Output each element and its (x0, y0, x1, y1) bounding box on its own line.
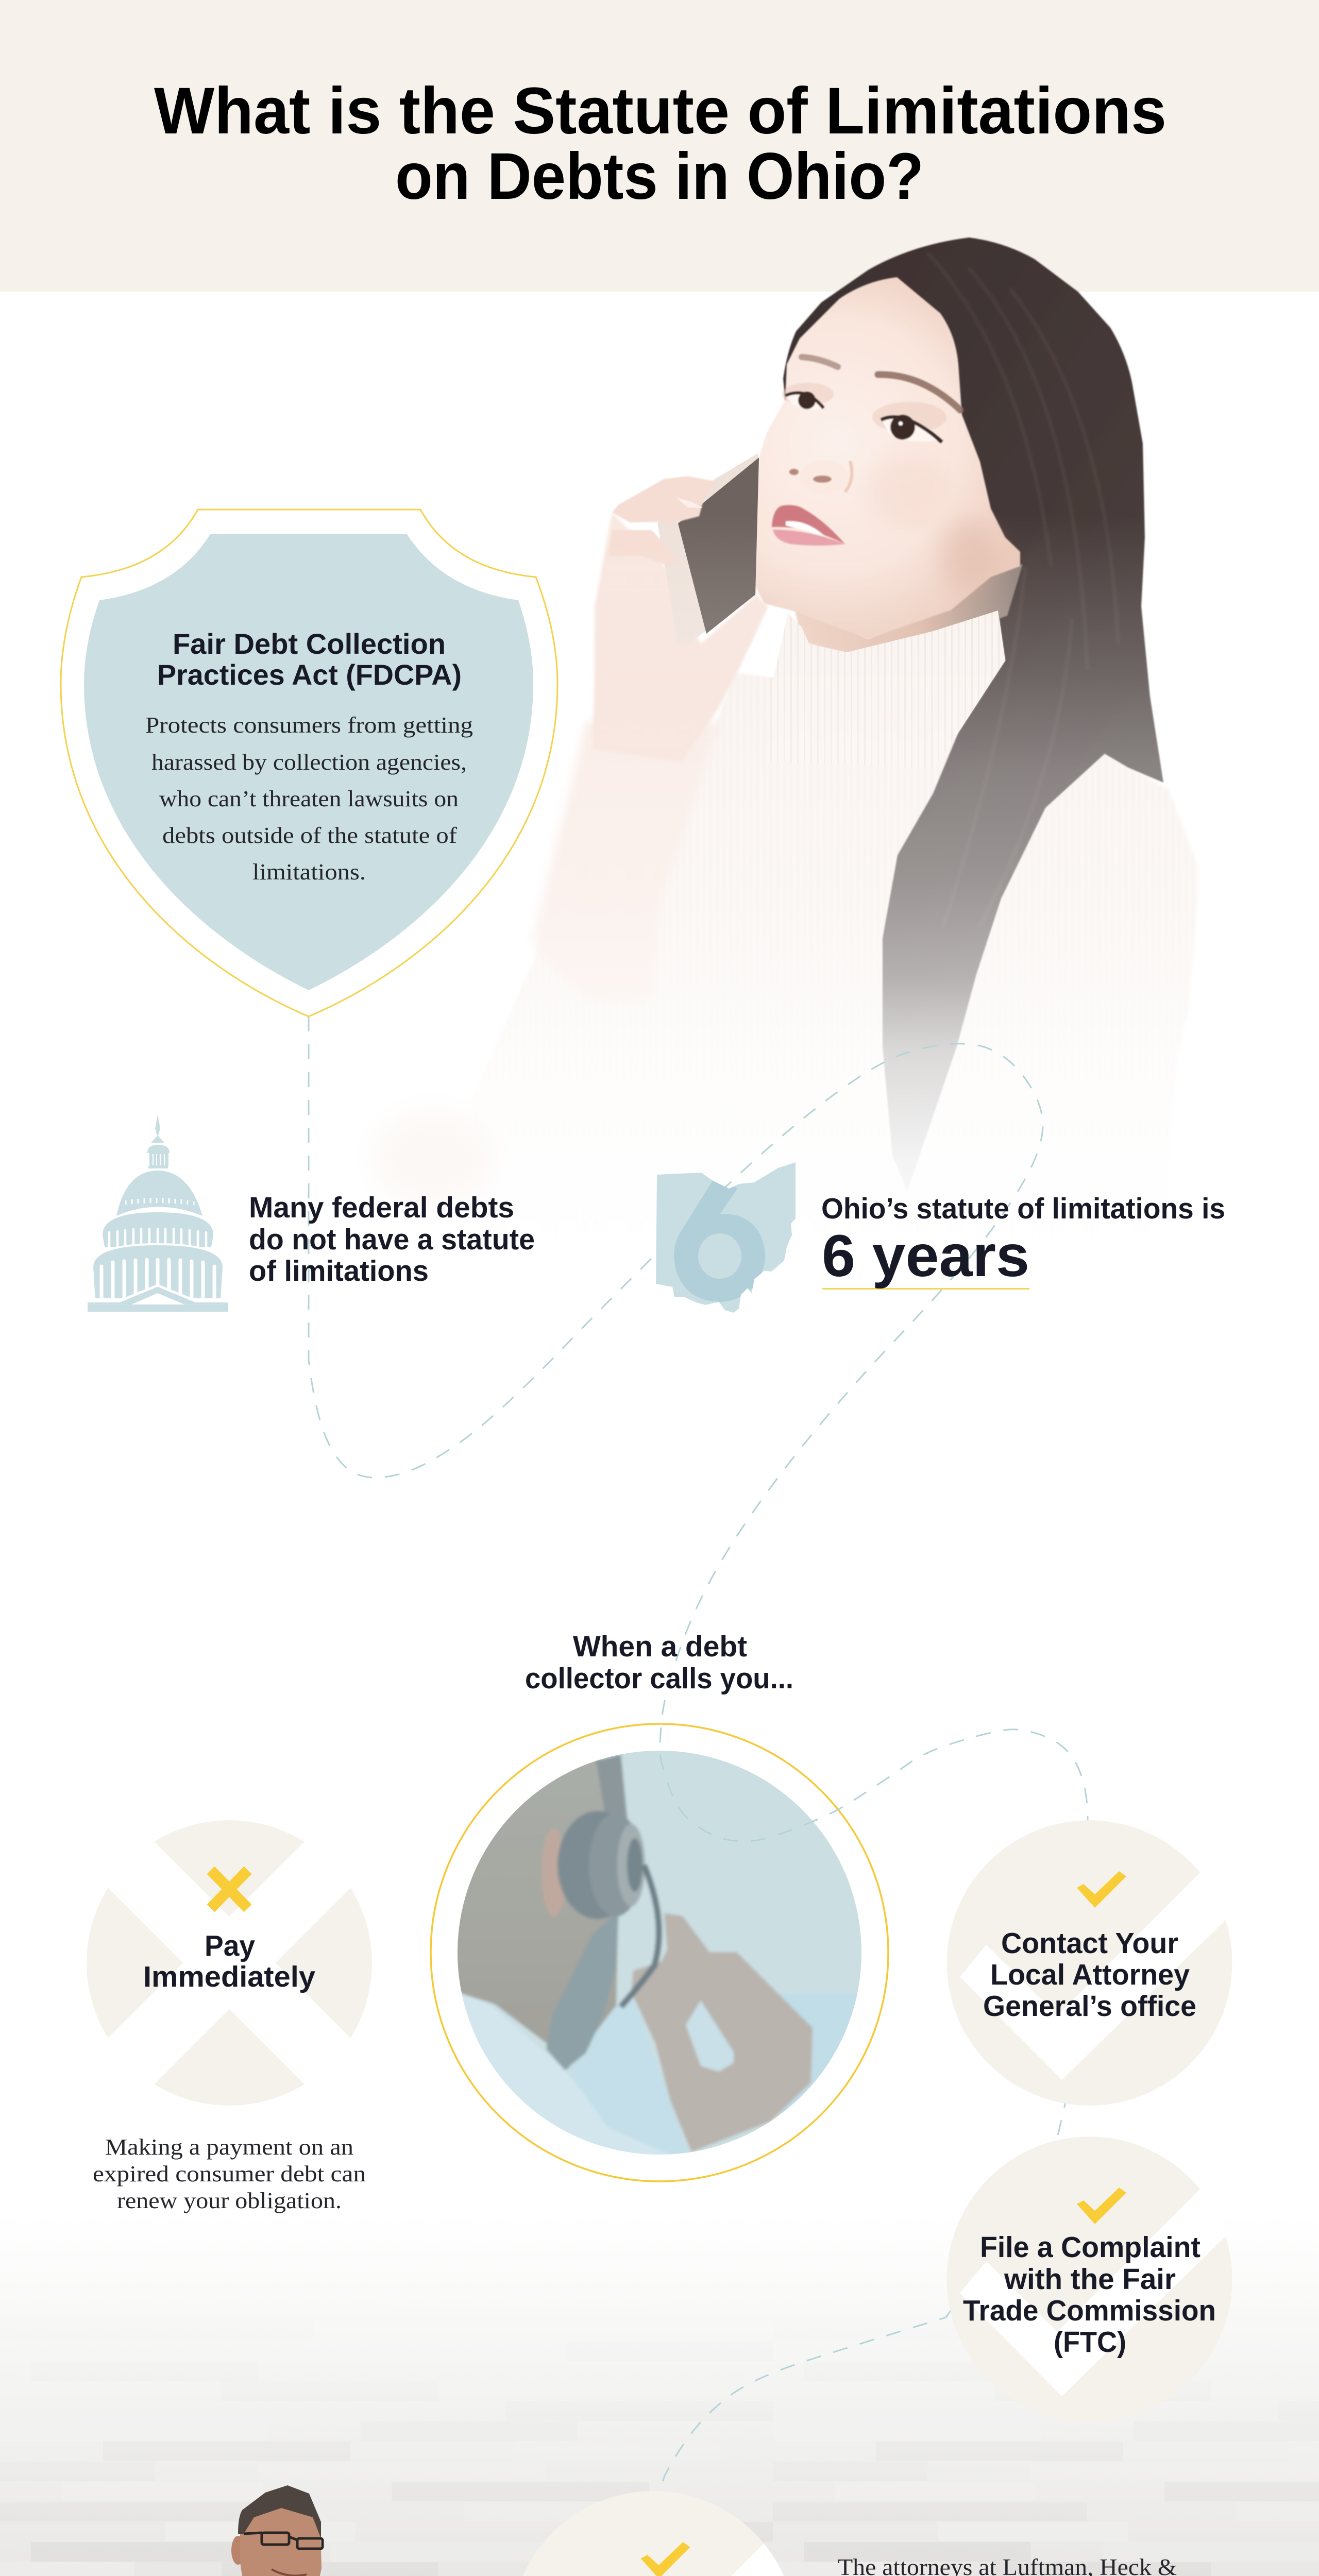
icon: yellow X (211, 1870, 248, 1908)
option: pay immediately: Immediately (143, 1960, 315, 1993)
face (752, 277, 1020, 639)
bottom marble wall background (0, 2316, 1319, 2576)
beard (546, 1910, 619, 2070)
shield heading: Practices Act (FDCPA) (157, 658, 462, 691)
hair (783, 238, 1163, 1191)
hair strands (927, 252, 1118, 927)
headset photo circle (448, 1741, 871, 2164)
shield body text: debts outside of the statute of (162, 823, 457, 848)
option: appear in court (511, 2491, 826, 2576)
icon: yellow check (641, 2542, 690, 2576)
neck (793, 564, 1023, 659)
head (240, 2504, 322, 2576)
option: contact attorney general (947, 1820, 1262, 2106)
hand (631, 1913, 813, 2152)
palm (593, 513, 768, 762)
sweater collar (767, 611, 1005, 769)
text: federal debts: of limitations (249, 1255, 429, 1287)
option: contact attorney general: Local Attorney (990, 1958, 1190, 1991)
text: Ohio statute: Ohio’s statute of limitations is (821, 1192, 1225, 1225)
shield outline (61, 510, 557, 1016)
circle with white check (947, 2137, 1262, 2422)
shield heading: Fair Debt Collection (173, 628, 446, 660)
glasses (244, 2533, 323, 2549)
text: Ohio statute (821, 1192, 1225, 1290)
ear (231, 2536, 245, 2565)
faint fist (372, 1109, 494, 1207)
text: payment caption: renew your obligation. (117, 2188, 342, 2213)
heading: when a debt collector calls: collector calls you... (525, 1662, 793, 1695)
eyes (782, 383, 946, 442)
option: file FTC complaint: Trade Commission (963, 2294, 1216, 2327)
circle with white check (947, 1820, 1262, 2106)
title: on Debts in Ohio? (395, 140, 924, 213)
gap in hand (686, 2001, 734, 2072)
lips (772, 505, 845, 546)
title: What is the Statute of Limitations (154, 74, 1166, 148)
shield body text: who can’t threaten lawsuits on (159, 786, 459, 811)
circle with white X (75, 1808, 384, 2117)
dashed connector path (309, 1016, 1088, 2491)
heading: when a debt collector calls: When a debt (573, 1630, 747, 1663)
mic boom (621, 1865, 659, 2007)
icon: yellow check (1077, 2188, 1126, 2224)
phone (657, 453, 759, 646)
title (154, 74, 1166, 213)
text: payment caption: expired consumer debt can (93, 2161, 366, 2187)
shield heading (157, 628, 462, 691)
heading: when a debt collector calls (525, 1630, 793, 1695)
photo: worried woman on the phone (471, 238, 1198, 1257)
smile (272, 2569, 307, 2575)
shield body text: harassed by collection agencies, (151, 750, 467, 775)
facial shading (866, 453, 997, 592)
fingers (608, 476, 715, 566)
gap of background between hand and collar (739, 606, 788, 677)
head (458, 1760, 618, 2070)
photo ring (431, 1724, 888, 2181)
ear (542, 1829, 566, 1917)
text: payment caption (93, 2134, 366, 2213)
option: contact attorney general: Contact Your (1001, 1927, 1178, 1960)
headset band (596, 1754, 628, 1826)
option: file FTC complaint: File a Complaint (980, 2231, 1200, 2264)
text: federal debts: do not have a statute (249, 1223, 535, 1256)
option: file FTC complaint: (FTC) (1054, 2326, 1126, 2359)
hair (238, 2485, 321, 2538)
numeral six (674, 1180, 765, 1302)
option: file FTC complaint: with the Fair (1004, 2263, 1176, 2296)
text: federal debts (249, 1191, 535, 1287)
raised forearm (533, 721, 720, 1003)
shield body text (145, 713, 473, 885)
nose (789, 460, 852, 493)
icon: Ohio state with six (656, 1162, 796, 1313)
option: pay immediately (75, 1808, 384, 2117)
option: pay immediately: Pay (205, 1929, 255, 1962)
yellow underline (822, 1288, 1029, 1290)
text: payment caption: Making a payment on an (105, 2134, 353, 2160)
option: contact attorney general: General’s office (983, 1990, 1196, 2023)
circle with white check (511, 2491, 826, 2576)
option: file FTC complaint (947, 2137, 1262, 2422)
shield body text: Protects consumers from getting (145, 713, 473, 738)
shield fill (84, 534, 533, 990)
text: Ohio statute: 6 years (822, 1223, 1029, 1289)
shield body text: limitations. (252, 859, 366, 885)
photo: attorney in suit (146, 2485, 397, 2576)
ear cup (557, 1811, 638, 1919)
fingernail (675, 497, 703, 508)
desk strip (782, 1995, 857, 2112)
icon: yellow check (1077, 1871, 1126, 1908)
eyebrows (802, 357, 960, 410)
sweater: body and arms (471, 639, 1198, 1257)
shirt (462, 1993, 666, 2155)
panel: FDCPA shield (61, 510, 557, 1016)
fade of woman into the page (335, 515, 1242, 1267)
background wall (473, 1751, 861, 2153)
header band (0, 0, 1319, 292)
icon: capitol dome (88, 1114, 228, 1312)
text: federal debts: Many federal debts (249, 1191, 514, 1224)
